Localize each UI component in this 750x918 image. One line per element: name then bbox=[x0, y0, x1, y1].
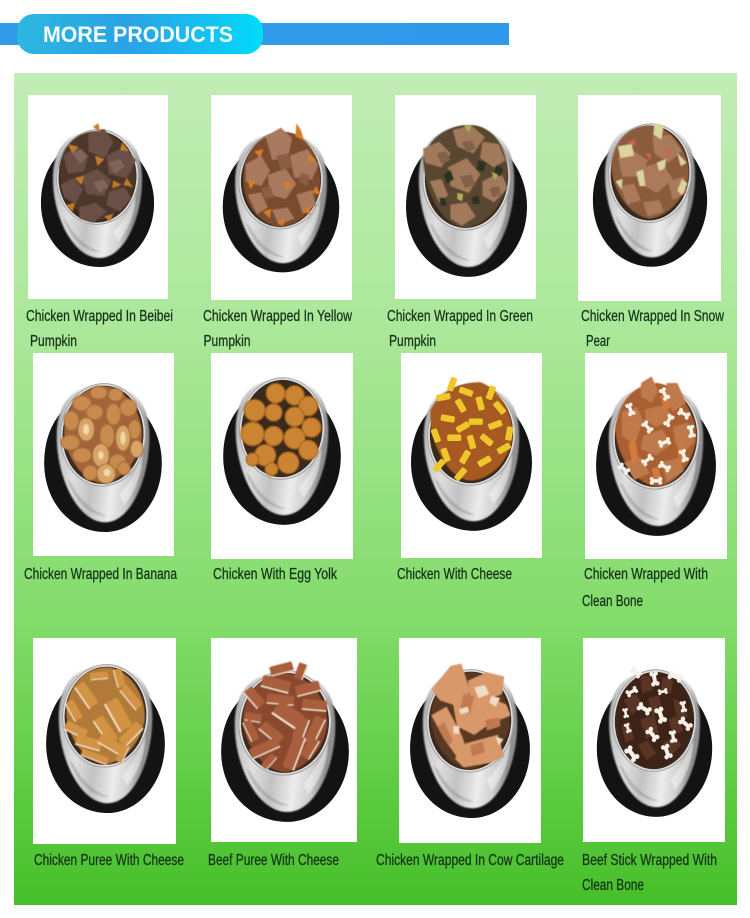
icon: bowl of beibei pumpkin chicken bbox=[41, 123, 154, 267]
label: Chicken With Egg Yolk bbox=[213, 566, 338, 583]
label: Pumpkin bbox=[204, 333, 250, 350]
card: Chicken Wrapped In Yellow Pumpkin bbox=[203, 95, 352, 350]
label: Clean Bone bbox=[582, 593, 643, 610]
icon: bowl of beef stick with clean bone bbox=[597, 666, 712, 817]
icon: bowl of banana chicken bbox=[44, 381, 162, 532]
card: Chicken With Egg Yolk bbox=[211, 353, 353, 583]
card: Beef Puree With Cheese bbox=[208, 638, 357, 869]
label: Pear bbox=[586, 333, 610, 350]
card: Chicken With Cheese bbox=[397, 353, 542, 583]
label: Chicken Puree With Cheese bbox=[34, 852, 184, 869]
header banner bbox=[0, 14, 509, 54]
card: Chicken Wrapped In Beibei Pumpkin bbox=[26, 95, 173, 350]
label: Chicken With Cheese bbox=[397, 566, 512, 583]
label bbox=[387, 308, 533, 350]
label bbox=[203, 308, 352, 350]
card: Chicken Puree With Cheese bbox=[33, 638, 184, 869]
label bbox=[581, 308, 724, 350]
label: Clean Bone bbox=[582, 877, 644, 894]
card: Chicken Wrapped In Banana bbox=[24, 353, 177, 583]
label: Chicken Wrapped With bbox=[584, 566, 708, 583]
icon: bowl of yellow pumpkin chicken bbox=[223, 123, 339, 272]
icon: bowl of chicken with cheese bbox=[411, 377, 532, 531]
icon: bowl of chicken with clean bone bbox=[596, 376, 716, 536]
icon: bowl of egg yolk chicken bbox=[223, 375, 341, 525]
icon: bowl of snow pear chicken bbox=[593, 121, 707, 267]
title: MORE PRODUCTS bbox=[43, 22, 233, 47]
icon: bowl of beef puree with cheese bbox=[221, 661, 349, 822]
header pill bbox=[17, 14, 263, 54]
card: Chicken Wrapped With Clean Bone bbox=[582, 353, 727, 610]
card: Beef Stick Wrapped With Clean Bone bbox=[582, 638, 725, 894]
icon: bowl of chicken puree with cheese bbox=[46, 662, 165, 813]
header bar bbox=[0, 23, 509, 45]
label: Chicken Wrapped In Beibei bbox=[26, 308, 173, 325]
label: Chicken Wrapped In Green bbox=[387, 308, 533, 325]
card: Chicken Wrapped In Snow Pear bbox=[578, 95, 724, 350]
icon: bowl of cow cartilage chicken bbox=[410, 664, 530, 818]
card: Chicken Wrapped In Green Pumpkin bbox=[387, 95, 536, 350]
label: Beef Puree With Cheese bbox=[208, 852, 339, 869]
label bbox=[26, 308, 173, 350]
icon: bowl of green pumpkin chicken bbox=[406, 123, 527, 277]
card: Chicken Wrapped In Cow Cartilage bbox=[376, 638, 564, 869]
label: Pumpkin bbox=[30, 333, 77, 350]
label: Chicken Wrapped In Cow Cartilage bbox=[376, 852, 564, 869]
label: Chicken Wrapped In Banana bbox=[24, 566, 177, 583]
label bbox=[582, 852, 717, 894]
label: Chicken Wrapped In Yellow bbox=[203, 308, 352, 325]
label: Pumpkin bbox=[389, 333, 436, 350]
label bbox=[582, 566, 708, 610]
